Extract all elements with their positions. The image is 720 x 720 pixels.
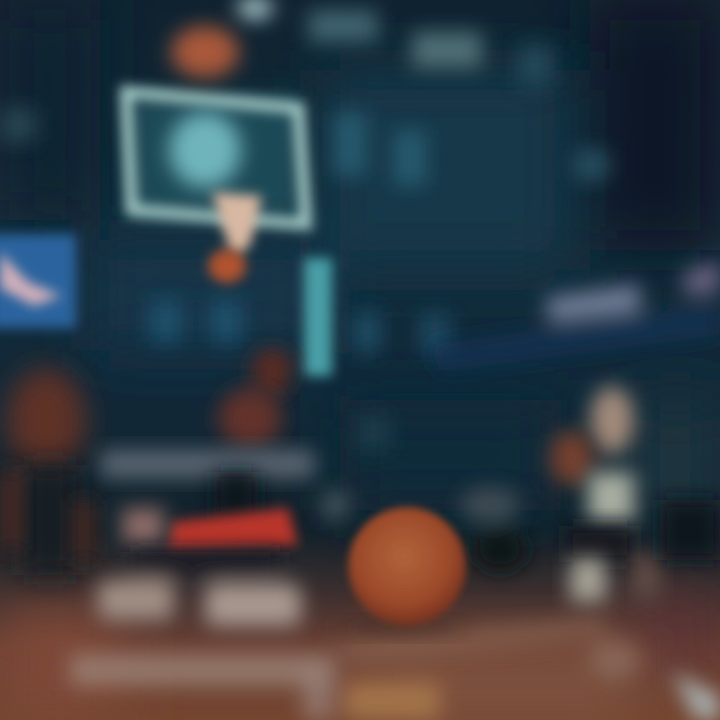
court markings [70, 618, 720, 720]
icon: backboard [126, 26, 306, 224]
sneakers [98, 552, 301, 626]
player: left [0, 368, 96, 575]
glowing teal post [304, 258, 332, 376]
player: right [550, 386, 660, 602]
upper stand lights [0, 0, 608, 449]
icon: hoop and net [208, 192, 262, 283]
icon: basketball [346, 507, 466, 636]
player: centre [100, 348, 315, 550]
right side lights [430, 260, 720, 372]
mid background blobs [321, 487, 720, 572]
screen: left display [0, 234, 76, 328]
